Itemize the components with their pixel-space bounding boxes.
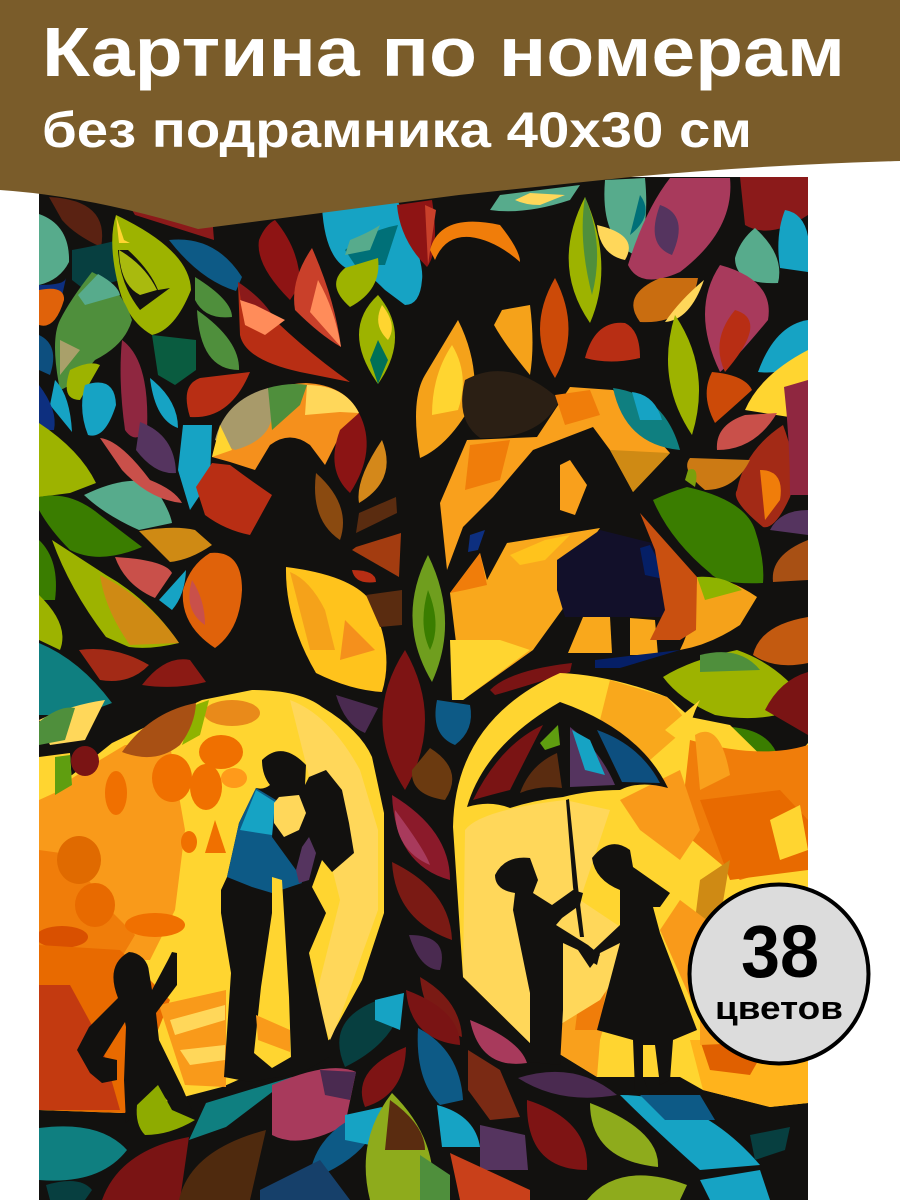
upper-left glowing arc with woman silhouette — [212, 383, 402, 692]
couple under umbrella silhouettes — [495, 844, 697, 1100]
bottom leaves — [39, 990, 790, 1200]
kissing couple silhouette — [221, 751, 354, 1082]
title: Картина по номерам — [42, 13, 845, 91]
upper-right glowing area with woman and child — [440, 387, 697, 700]
top-centre leaves — [238, 195, 640, 458]
lower-right glowing area with arch — [453, 673, 808, 1107]
umbrella — [467, 702, 668, 937]
central trunk leaves — [382, 555, 471, 1037]
badge: 38 colours: 38 — [741, 910, 819, 993]
brown title banner — [0, 0, 900, 229]
lime leaf by child's feet — [137, 1085, 195, 1135]
left-side leaves — [39, 422, 378, 745]
lower-left glowing area with arch — [36, 690, 384, 1113]
badge: 38 colours — [690, 884, 868, 1064]
badge: 38 colours: цветов — [715, 990, 843, 1026]
painting: tree of life with families — [36, 177, 809, 1200]
leaf above the arch — [122, 703, 196, 757]
right-side leaves — [653, 380, 808, 778]
subtitle: без подрамника 40x30 см — [42, 102, 752, 158]
top-left leaves — [39, 190, 250, 438]
running child silhouette — [77, 952, 186, 1112]
top-right leaves — [490, 177, 809, 435]
